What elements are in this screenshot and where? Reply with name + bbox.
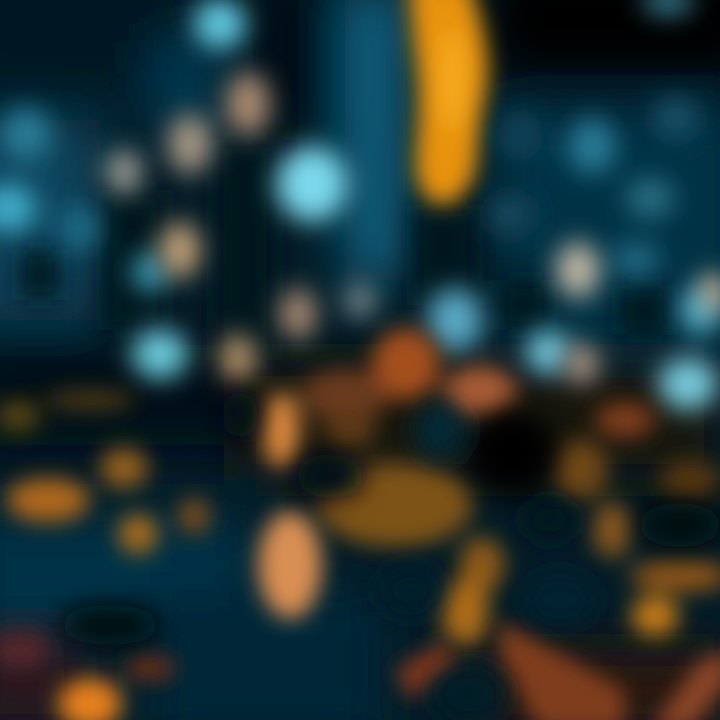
warm beige lights: [106, 72, 720, 384]
cyan glowing lights: [0, 0, 720, 410]
copper diagonal bands: [395, 620, 720, 720]
bright peach vertical glow: [0, 511, 322, 720]
orange vertical light column: [408, 0, 488, 205]
dark sphere and shadow shapes: [60, 391, 720, 720]
orange and brown circuit shapes: [0, 328, 720, 646]
dark vertical towers: [20, 140, 670, 360]
